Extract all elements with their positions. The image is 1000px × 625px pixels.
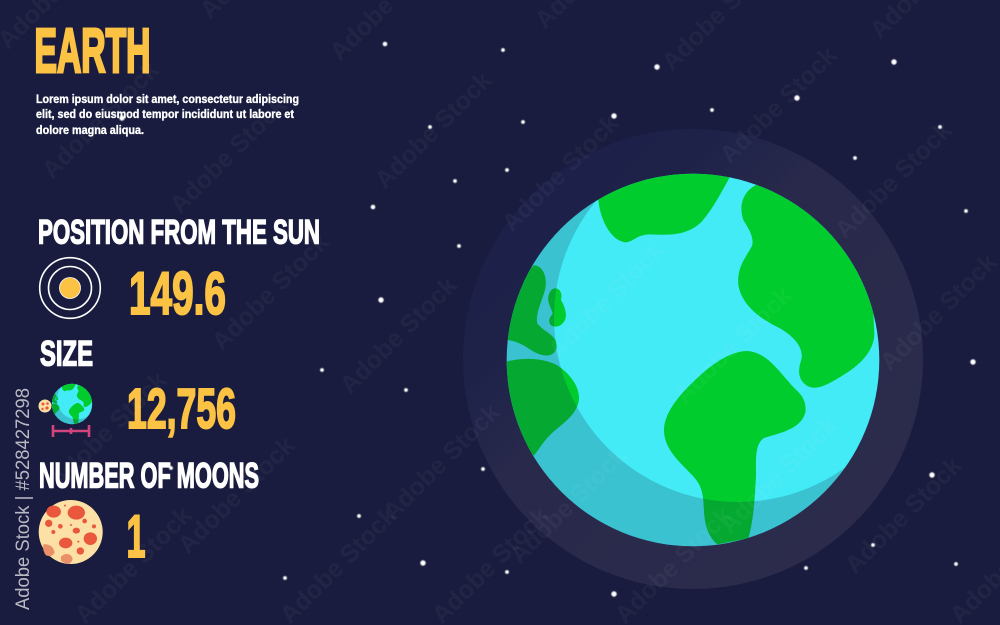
size ruler [53,425,89,437]
value: size: 12,756 [127,377,236,441]
icon: earth size comparison [38,378,97,437]
watermark pattern: Adobe Stock [369,66,497,194]
watermark pattern: Adobe Stock [36,56,164,184]
watermark pattern: Adobe Stock [164,91,292,219]
description text [36,93,299,137]
watermark pattern: Adobe Stock [714,41,842,169]
watermark pattern: Adobe Stock [874,248,1000,376]
watermark pattern: Adobe Stock [44,366,172,494]
watermark pattern: Adobe Stock [206,228,334,356]
description text: Lorem ipsum dolor sit amet, consectetur adipiscing [36,93,299,106]
small earth [50,378,97,430]
description text: elit, sed do eiusmod tempor incididunt ut labore et [36,108,294,121]
heading: number of moons: NUMBER OF MOONS [39,456,259,496]
watermark pattern: Adobe Stock [496,109,624,237]
watermark pattern: Adobe Stock [829,116,957,244]
value: distance from the sun: 149.6 [129,260,226,327]
icon: moon with craters [39,500,103,564]
atmosphere halo [463,129,923,589]
watermark pattern: Adobe Stock [542,236,670,364]
heading: size: SIZE [40,334,93,374]
watermark pattern: Adobe Stock [669,281,797,409]
watermark pattern: Adobe Stock [714,411,842,539]
watermark pattern: Adobe Stock [334,271,462,399]
description text: dolore magna aliqua. [36,124,144,137]
earth globe [493,120,922,600]
watermark pattern: Adobe Stock [377,398,505,526]
star field [119,42,976,597]
planet earth with atmosphere [463,120,923,600]
watermark pattern: Adobe Stock [172,431,300,559]
stock id side label: Adobe Stock | #528427298 [13,388,34,610]
watermark pattern: Adobe Stock [839,451,967,579]
value: number of moons: 1 [126,503,146,570]
small moon [38,400,52,412]
heading: position from the sun: POSITION FROM THE SUN [38,214,320,252]
icon: sun with orbits [40,258,100,318]
watermark pattern: Adobe Stock [504,441,632,569]
title: EARTH [34,17,150,86]
